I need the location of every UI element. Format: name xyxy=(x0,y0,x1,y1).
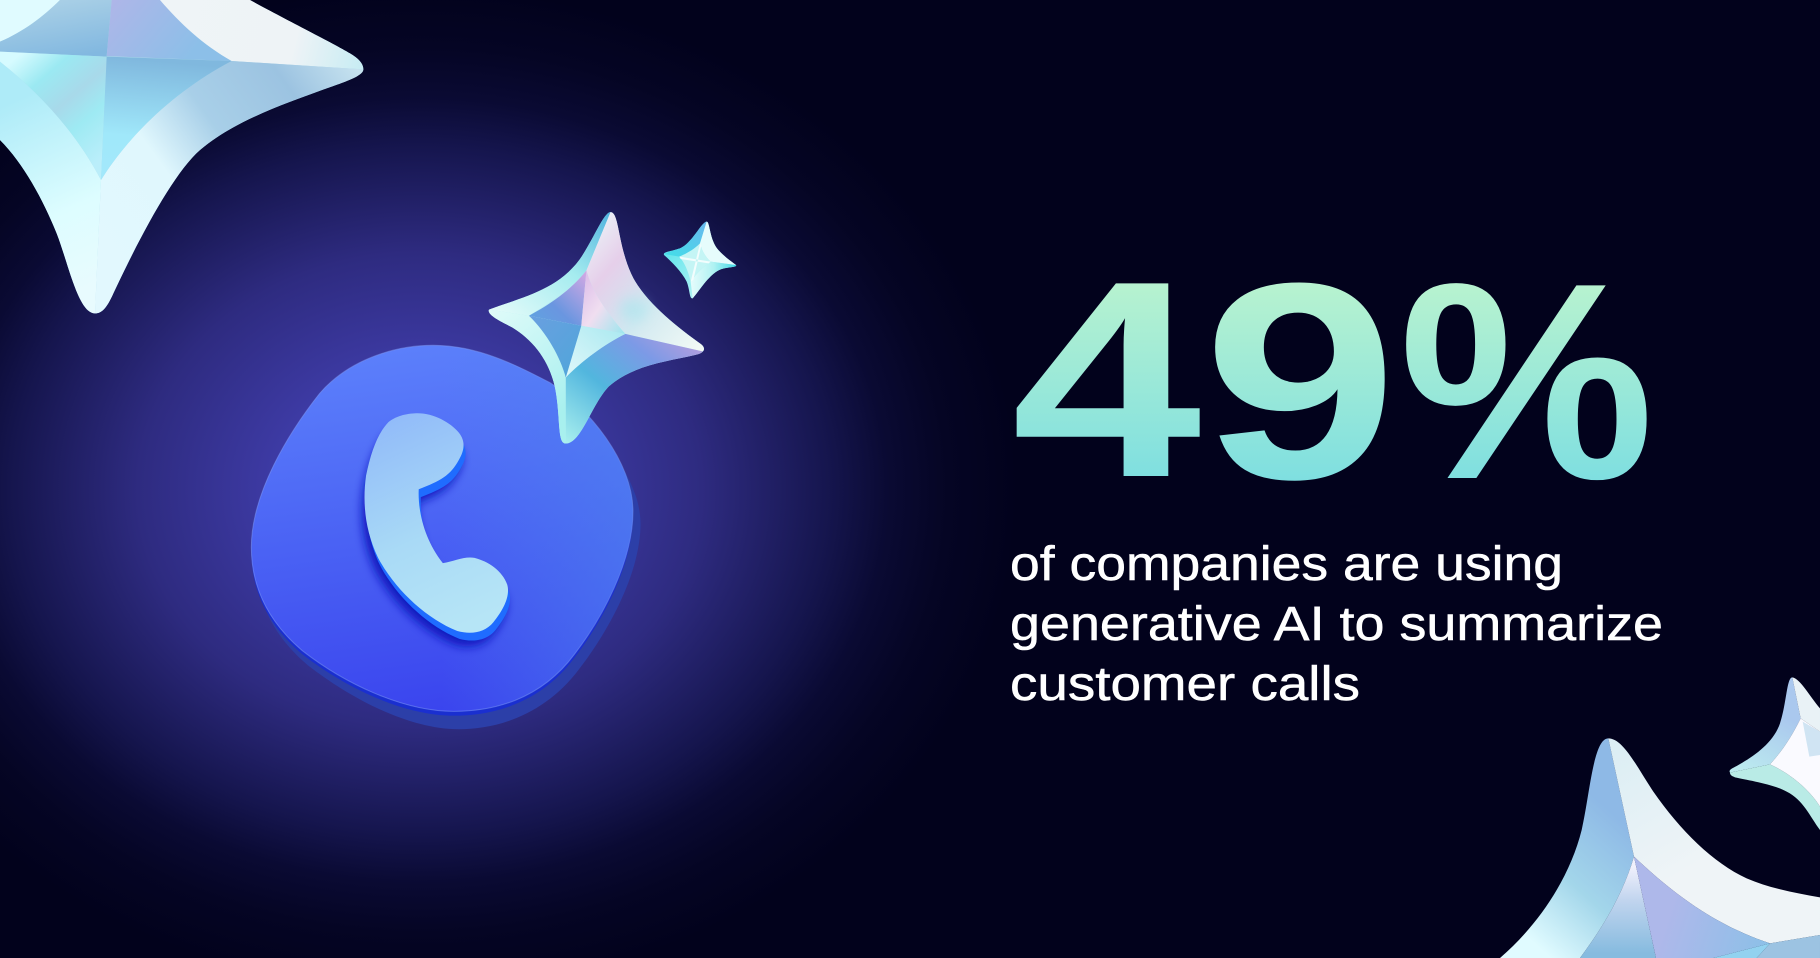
decorative sparkle: bottom right small xyxy=(1730,677,1820,830)
decorative sparkle: top left xyxy=(0,0,363,313)
icon: phone badge with large sparkle xyxy=(251,212,704,729)
badge face xyxy=(251,345,633,711)
badge rim xyxy=(251,349,633,716)
percent sign: % xyxy=(1399,225,1654,538)
badge back layer xyxy=(257,360,641,729)
large sparkle xyxy=(489,212,704,444)
small sparkle xyxy=(664,222,736,298)
description text xyxy=(1010,538,1663,711)
big stat number xyxy=(1012,223,1654,538)
phone soft shadow xyxy=(362,427,506,646)
decorative sparkle: bottom right large xyxy=(1500,738,1820,958)
digit 9: 9 xyxy=(1203,225,1398,538)
line 2: generative AI to summarize xyxy=(1010,598,1663,651)
phone handset xyxy=(365,413,508,633)
digit 4: 4 xyxy=(1012,223,1204,536)
line 3: customer calls xyxy=(1010,658,1360,711)
line 1: of companies are using xyxy=(1010,538,1563,591)
phone depth xyxy=(367,421,510,641)
